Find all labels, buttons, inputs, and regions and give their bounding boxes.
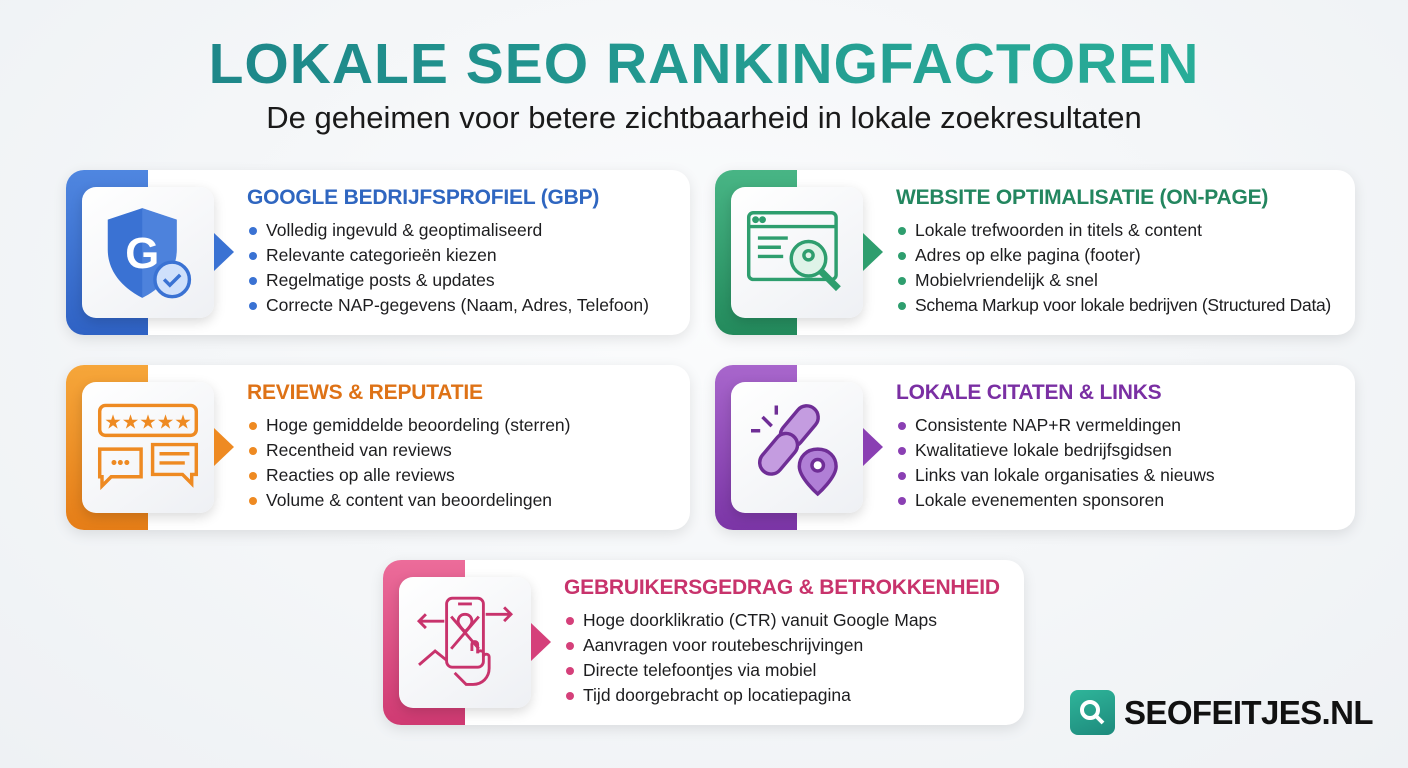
text: reviews: Reacties op alle reviews <box>266 465 455 485</box>
text: website: Schema Markup voor lokale bedrijven (Structured Data) <box>915 295 1331 315</box>
arrow <box>863 428 883 466</box>
text: gedrag: GEBRUIKERSGEDRAG & BETROKKENHEID <box>564 576 1000 599</box>
text: gbp: Volledig ingevuld & geoptimaliseerd <box>266 220 542 240</box>
text: gbp: GOOGLE BEDRIJFSPROFIEL (GBP) <box>247 186 599 209</box>
arrow <box>863 233 883 271</box>
text: website: Mobielvriendelijk & snel <box>915 270 1098 290</box>
panel: reviews <box>66 365 690 530</box>
text: citaten: LOKALE CITATEN & LINKS <box>896 381 1161 404</box>
panel: citaten & links <box>715 365 1355 530</box>
text: citaten: Links van lokale organisaties & nieuws <box>915 465 1215 485</box>
title <box>0 31 1408 97</box>
panel: gebruikersgedrag <box>383 560 1024 725</box>
text: citaten: Lokale evenementen sponsoren <box>915 490 1164 510</box>
text: gbp: Relevante categorieën kiezen <box>266 245 497 265</box>
icon: shield G: G <box>125 228 159 277</box>
text: reviews: REVIEWS & REPUTATIE <box>247 381 483 404</box>
text: gedrag <box>564 576 1000 705</box>
text: website: Lokale trefwoorden in titels & content <box>915 220 1202 240</box>
text: website <box>896 186 1331 315</box>
subtitle: De geheimen voor betere zichtbaarheid in lokale zoekresultaten <box>266 100 1142 135</box>
icon: stars and chat bubbles: ••• <box>111 451 130 472</box>
text: gbp <box>247 186 649 315</box>
text: gbp: Correcte NAP-gegevens (Naam, Adres, Telefoon) <box>266 295 649 315</box>
text: citaten: Kwalitatieve lokale bedrijfsgidsen <box>915 440 1172 460</box>
arrow <box>214 428 234 466</box>
text: reviews: Recentheid van reviews <box>266 440 452 460</box>
text: gedrag: Hoge doorklikratio (CTR) vanuit Google Maps <box>583 610 937 630</box>
text: gbp: Regelmatige posts & updates <box>266 270 495 290</box>
text: citaten <box>896 381 1215 510</box>
logo <box>1070 690 1373 735</box>
text: gedrag: Tijd doorgebracht op locatiepagina <box>583 685 851 705</box>
panel: google bedrijfsprofiel <box>66 170 690 335</box>
text: reviews <box>247 381 570 510</box>
text: reviews: Hoge gemiddelde beoordeling (sterren) <box>266 415 570 435</box>
text: gedrag: Aanvragen voor routebeschrijvingen <box>583 635 863 655</box>
arrow <box>214 233 234 271</box>
icon: browser magnifier <box>731 187 863 318</box>
icon: chain and pin <box>731 382 863 513</box>
icon: stars and chat bubbles: ★★★★★ <box>104 410 192 433</box>
arrow <box>531 623 551 661</box>
icon: stars and chat bubbles <box>82 382 214 513</box>
text: gedrag: Directe telefoontjes via mobiel <box>583 660 816 680</box>
icon: phone with map and hand <box>399 577 531 708</box>
text: website: WEBSITE OPTIMALISATIE (ON-PAGE) <box>896 186 1268 209</box>
panel: website optimalisatie <box>715 170 1355 335</box>
icon: search <box>1070 690 1115 735</box>
text: citaten: Consistente NAP+R vermeldingen <box>915 415 1181 435</box>
text: website: Adres op elke pagina (footer) <box>915 245 1141 265</box>
logo: SEOFEITJES.NL <box>1124 694 1373 731</box>
title: LOKALE SEO RANKINGFACTOREN <box>209 32 1199 96</box>
icon: shield G <box>82 187 214 318</box>
text: reviews: Volume & content van beoordelingen <box>266 490 552 510</box>
